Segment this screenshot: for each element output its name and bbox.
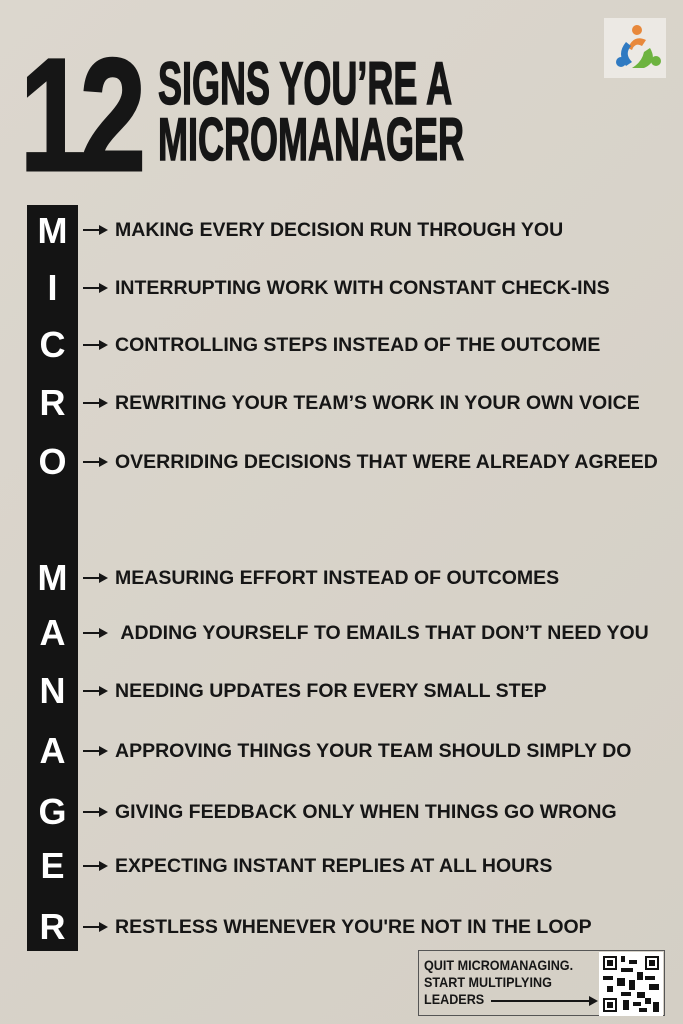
callout text: START MULTIPLYING [424,974,552,990]
text: NEEDING UPDATES FOR EVERY SMALL STEP [115,680,547,702]
text: A [40,612,66,653]
text: EXPECTING INSTANT REPLIES AT ALL HOURS [115,855,552,877]
title text: SIGNS YOU’RE A [158,50,452,117]
QR code [599,952,663,1016]
list items: MAKING EVERY DECISION RUN THROUGH YOU [115,219,563,241]
text: APPROVING THINGS YOUR TEAM SHOULD SIMPLY DO [115,740,631,762]
text: R [40,382,66,423]
arrow [491,1000,591,1002]
text: N [40,670,66,711]
text: ADDING YOURSELF TO EMAILS THAT DON’T NEED YOU [120,622,649,644]
text: CONTROLLING STEPS INSTEAD OF THE OUTCOME [115,334,600,356]
title number 12: 12 [20,25,140,204]
logo [604,18,666,78]
text: I [47,267,58,308]
callout text [424,957,573,1007]
text: INTERRUPTING WORK WITH CONSTANT CHECK-INS [115,277,610,299]
text: C [40,324,66,365]
text: M [38,210,68,251]
text: OVERRIDING DECISIONS THAT WERE ALREADY AGREED [115,451,658,473]
text: REWRITING YOUR TEAM’S WORK IN YOUR OWN VOICE [115,392,640,414]
title text: MICROMANAGER [158,106,464,173]
callout text: QUIT MICROMANAGING. [424,957,573,973]
text: R [40,906,66,947]
text: RESTLESS WHENEVER YOU'RE NOT IN THE LOOP [115,916,592,938]
callout text: LEADERS [424,991,484,1007]
text: M [38,557,68,598]
text: G [38,791,66,832]
callout box with QR [418,950,665,1016]
text: MEASURING EFFORT INSTEAD OF OUTCOMES [115,567,559,589]
text: A [40,730,66,771]
text: GIVING FEEDBACK ONLY WHEN THINGS GO WRONG [115,801,617,823]
text: O [38,441,66,482]
text: E [40,845,64,886]
vertical black bar with MICRO MANAGER [27,205,78,951]
title text [158,50,464,173]
